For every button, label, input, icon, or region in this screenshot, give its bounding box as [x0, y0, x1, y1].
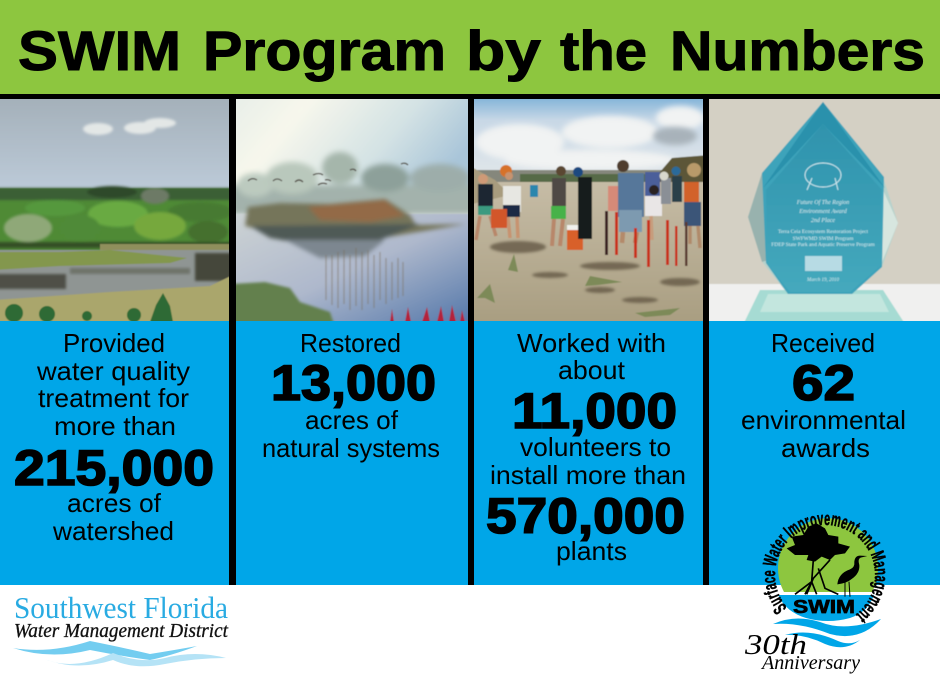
logo waves [13, 641, 197, 660]
column 3 text: about [558, 355, 626, 385]
photo: award trophy [703, 93, 940, 327]
trophy body [748, 102, 898, 294]
column 2 text: natural systems [262, 433, 440, 463]
column 2 text [262, 328, 440, 463]
photo: award trophy: Terra Ceia Ecosystem Restoration Project [778, 229, 869, 235]
column 1 text [14, 328, 214, 546]
volunteers [476, 160, 701, 250]
title: Program [203, 19, 446, 82]
logo: SWIM 30th anniversary [744, 514, 886, 674]
column 4 text: Received [771, 328, 875, 358]
photo: award trophy: Future Of The Region [796, 199, 849, 206]
photo: award trophy: FDEP State Park and Aquatic Preserve Program [771, 242, 876, 248]
green disc [778, 518, 878, 592]
column 1 text: water quality [36, 356, 190, 386]
photo: award trophy: 2nd Place [811, 218, 835, 224]
stat: 13,000: 13,000 [271, 355, 436, 411]
water band [778, 595, 874, 621]
Anniversary: Anniversary [760, 652, 860, 674]
stat: 215,000: 215,000 [14, 440, 214, 496]
column 3 text: volunteers to [520, 432, 671, 462]
mangrove and heron [787, 523, 867, 597]
column 1 text: more than [54, 411, 176, 441]
column dividers and blue panels [0, 99, 940, 585]
column 1 text: Provided [63, 328, 165, 358]
logo: Southwest Florida Water Management District: Southwest Florida [14, 590, 228, 625]
title: Numbers [670, 19, 925, 82]
header band [0, 0, 940, 100]
SWIM wordmark: SWIM [793, 597, 855, 617]
column 1 text: watershed [52, 516, 174, 546]
column 3 text [486, 328, 686, 566]
title: SWIM [18, 19, 181, 82]
column 3 text: install more than [490, 460, 686, 490]
column 4 text: awards [781, 433, 870, 463]
photo: volunteers planting [468, 93, 709, 327]
logo: Southwest Florida Water Management District [13, 590, 228, 666]
waves [773, 618, 881, 636]
column 1 text: acres of [67, 488, 162, 518]
column 4 text [741, 328, 906, 463]
column 2 text: acres of [305, 405, 399, 435]
photo: award trophy: SWFWMD SWIM Program [793, 236, 854, 242]
stat: 570,000: 570,000 [486, 488, 685, 544]
title: by [466, 19, 541, 82]
title [18, 19, 925, 82]
30th: 30th [744, 629, 807, 661]
stat: 11,000: 11,000 [512, 383, 677, 439]
photo: award trophy: March 19, 2010 [806, 278, 839, 283]
photo: misty lake with birds [230, 93, 474, 327]
column 4 text: environmental [741, 405, 906, 435]
column 1 text: treatment for [38, 383, 189, 413]
circular lettering: Surface Water Improvement and Management [762, 514, 886, 624]
column 3 text: Worked with [517, 328, 666, 358]
column 3 text: plants [556, 536, 627, 566]
photo: award trophy: Environment Award [798, 209, 848, 215]
column 2 text: Restored [300, 328, 401, 358]
stat: 62: 62 [792, 355, 855, 411]
photo: wetland landscape [0, 93, 235, 327]
title: the [560, 19, 647, 82]
logo: Southwest Florida Water Management District: Water Management District [14, 620, 228, 642]
